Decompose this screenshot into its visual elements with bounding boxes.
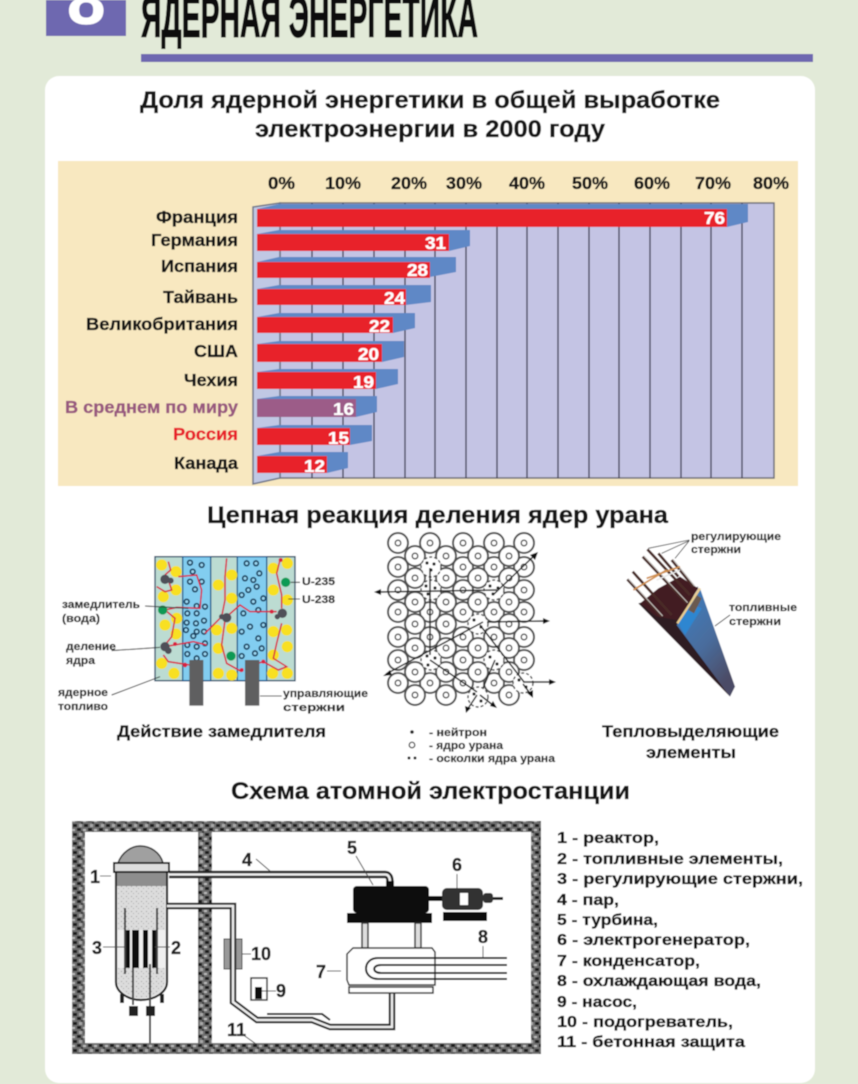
generator 6 bbox=[442, 888, 503, 921]
axis labels: 10% bbox=[325, 173, 361, 193]
bar: Canada bbox=[257, 452, 348, 476]
country labels bbox=[65, 207, 238, 473]
bar: Taiwan: 24 bbox=[384, 288, 405, 308]
scheme legend: 8 - охлаждающая вода, bbox=[557, 973, 761, 990]
axis labels: 40% bbox=[509, 173, 545, 193]
axis labels bbox=[268, 173, 789, 193]
scheme legend: 5 - турбина, bbox=[557, 912, 658, 929]
diagram labels: стержни bbox=[283, 702, 345, 714]
country labels: Франция bbox=[156, 207, 238, 227]
return pipes bbox=[167, 906, 392, 1027]
caption: moderator: Действие замедлителя bbox=[117, 722, 326, 741]
axis labels: 20% bbox=[391, 173, 427, 193]
panel: bar chart bbox=[58, 161, 798, 486]
country labels: США bbox=[194, 341, 238, 361]
scheme legend: 11 - бетонная защита bbox=[557, 1034, 745, 1051]
scheme legend: 9 - насос, bbox=[557, 994, 637, 1011]
bar: Czechia: 19 bbox=[353, 372, 374, 392]
diagram labels: U-235 bbox=[302, 576, 335, 588]
caption: fuel elements: Тепловыделяющие bbox=[602, 722, 779, 741]
scheme number labels: 2 bbox=[171, 938, 181, 958]
country labels: Испания bbox=[161, 256, 238, 276]
plot walls and grid bbox=[253, 203, 774, 484]
title rule bbox=[141, 54, 813, 62]
scheme number labels: 1 bbox=[90, 867, 100, 887]
lattice legend: - ядро урана bbox=[429, 740, 504, 752]
bar: world average: 16 bbox=[333, 399, 354, 419]
country labels: Германия bbox=[151, 230, 238, 250]
scheme number labels: 7 bbox=[316, 962, 326, 982]
heading: share of nuclear power: электроэнергии в 2000 году bbox=[255, 116, 605, 143]
bar: France: 76 bbox=[704, 208, 725, 228]
heading: chain reaction: Цепная реакция деления ядер урана bbox=[207, 502, 669, 529]
axis labels: 70% bbox=[695, 173, 731, 193]
scheme number labels: 8 bbox=[478, 927, 488, 947]
reactor bbox=[114, 846, 169, 1043]
fuel assembly labels: регулирующие bbox=[691, 531, 781, 543]
scheme legend: 2 - топливные элементы, bbox=[557, 851, 783, 868]
country labels: Чехия bbox=[184, 370, 238, 390]
concrete shield bbox=[72, 821, 541, 1054]
bar: USA bbox=[257, 341, 404, 364]
bar: Germany: 31 bbox=[425, 233, 446, 253]
bar: France bbox=[257, 204, 748, 228]
scheme legend bbox=[557, 830, 803, 1051]
bar: Russia bbox=[257, 425, 372, 448]
fuel assembly labels: топливные bbox=[729, 602, 797, 614]
heater 10 bbox=[224, 939, 242, 969]
heading: NPP scheme: Схема атомной электростанции bbox=[231, 778, 630, 805]
diagram labels: ядерное bbox=[58, 687, 108, 699]
axis labels: 80% bbox=[753, 173, 789, 193]
diagram labels: управляющие bbox=[283, 688, 368, 700]
scheme number labels: 11 bbox=[227, 1020, 246, 1040]
scheme number labels: 5 bbox=[347, 838, 357, 858]
bar: Czechia bbox=[257, 369, 398, 392]
scheme number labels: 10 bbox=[251, 944, 271, 964]
diagram labels: топливо bbox=[58, 701, 108, 713]
scheme number labels bbox=[90, 838, 488, 1044]
axis labels: 50% bbox=[572, 173, 608, 193]
lattice legend: - нейтрон bbox=[429, 727, 487, 739]
axis labels: 60% bbox=[634, 173, 670, 193]
country labels: Тайвань bbox=[163, 287, 238, 307]
fuel assembly labels: стержни bbox=[691, 544, 741, 556]
diagram labels: (вода) bbox=[62, 613, 100, 625]
diagram labels: деление bbox=[66, 641, 116, 653]
lattice legend bbox=[408, 727, 556, 765]
bar: Spain bbox=[257, 257, 456, 280]
scheme number labels: 6 bbox=[452, 855, 462, 875]
heading: share of nuclear power bbox=[140, 87, 720, 143]
scheme number labels: 9 bbox=[276, 981, 286, 1001]
bar: world average bbox=[257, 396, 377, 419]
country labels: В среднем по миру bbox=[65, 397, 238, 417]
steam pipe 4 bbox=[169, 874, 390, 884]
bars bbox=[257, 204, 748, 476]
turbine 5 bbox=[347, 881, 442, 923]
bar: Taiwan bbox=[257, 285, 431, 308]
bar: Spain: 28 bbox=[407, 260, 428, 280]
scheme legend: 1 - реактор, bbox=[557, 830, 659, 847]
diagram labels: ядра bbox=[66, 655, 96, 667]
scheme legend: 6 - электрогенератор, bbox=[557, 932, 750, 949]
axis labels: 30% bbox=[446, 173, 482, 193]
diagram: uranium lattice bbox=[374, 533, 556, 765]
axis labels: 0% bbox=[268, 173, 295, 193]
scheme legend: 10 - подогреватель, bbox=[557, 1014, 733, 1031]
diagram: fuel assembly bbox=[627, 531, 797, 697]
scheme legend: 4 - пар, bbox=[557, 892, 619, 909]
number badge bbox=[46, 0, 126, 39]
diagram labels bbox=[58, 576, 368, 714]
bar: Canada: 12 bbox=[304, 456, 325, 476]
country labels: Великобритания bbox=[86, 314, 238, 334]
diagram labels: U-238 bbox=[302, 594, 335, 606]
bar: Russia: 15 bbox=[328, 428, 349, 448]
pump 9 bbox=[251, 978, 267, 1000]
bar: USA: 20 bbox=[358, 344, 379, 364]
bar: UK bbox=[257, 313, 415, 336]
scheme legend: 7 - конденсатор, bbox=[557, 953, 700, 970]
caption: fuel elements bbox=[602, 722, 779, 762]
lattice legend: - осколки ядра урана bbox=[429, 753, 556, 765]
heading: share of nuclear power: Доля ядерной энергетики в общей выработке bbox=[140, 87, 720, 114]
diagram labels: замедлитель bbox=[62, 599, 140, 611]
country labels: Канада bbox=[174, 453, 238, 473]
bar: Germany bbox=[257, 230, 470, 253]
fuel assembly labels: стержни bbox=[729, 616, 781, 628]
diagram: nuclear plant bbox=[72, 821, 541, 1054]
scheme legend: 3 - регулирующие стержни, bbox=[557, 871, 803, 888]
bar: UK: 22 bbox=[369, 316, 390, 336]
fuel assembly labels bbox=[691, 531, 797, 628]
scheme number labels: 3 bbox=[92, 938, 102, 958]
condenser 7 bbox=[347, 923, 507, 993]
scheme number labels: 4 bbox=[242, 850, 252, 870]
steam pipe inner bbox=[169, 874, 390, 884]
diagram: moderator action bbox=[58, 557, 368, 714]
country labels: Россия bbox=[173, 424, 238, 444]
caption: fuel elements: элементы bbox=[646, 743, 736, 762]
